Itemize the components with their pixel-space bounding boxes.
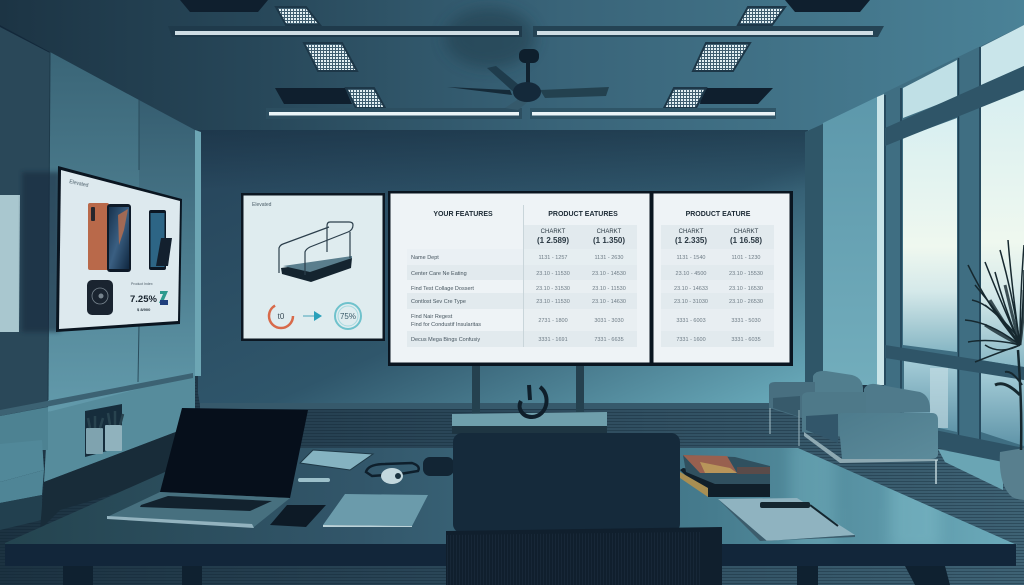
row values: 7331 - 1600 bbox=[676, 337, 706, 343]
TV heading: Elevated bbox=[69, 179, 89, 189]
laptop bbox=[107, 408, 308, 528]
panel: features table bbox=[390, 194, 650, 362]
row labels: Center Care Ne Eating bbox=[411, 271, 467, 277]
row values: 1131 - 1257 bbox=[539, 255, 567, 261]
table headings bbox=[433, 211, 618, 218]
conference table bbox=[5, 440, 1017, 585]
window frames bbox=[885, 47, 980, 440]
row values: 23.10 - 31530 bbox=[536, 286, 570, 292]
front armchair bbox=[799, 384, 938, 484]
sculpture ornament bbox=[520, 385, 547, 417]
row values bbox=[674, 255, 763, 343]
cabinet and sofa on left bbox=[0, 373, 195, 530]
row labels bbox=[411, 255, 481, 343]
ceiling light fixtures bbox=[168, 0, 884, 119]
row labels: Find for Condustif Insularitas bbox=[411, 322, 481, 328]
chart: orange ring: t0 bbox=[278, 312, 285, 321]
icon: colourful logo bbox=[159, 291, 168, 305]
office chair bbox=[446, 433, 722, 585]
chart: orange ring bbox=[269, 304, 293, 328]
stack of books bbox=[680, 455, 770, 497]
row values: 7331 - 6635 bbox=[594, 337, 624, 343]
sunlit floor bbox=[938, 449, 1003, 490]
ceiling fan shadow bbox=[445, 8, 535, 68]
row values: 3331 - 6035 bbox=[731, 337, 761, 343]
headphones bbox=[366, 463, 419, 484]
clipboard bbox=[300, 450, 373, 470]
column subheadings: CHARKT bbox=[734, 229, 759, 235]
icon: blue phone bbox=[149, 210, 172, 270]
row values: 1101 - 1230 bbox=[732, 255, 760, 261]
product screen with treadmill bbox=[241, 193, 385, 341]
ceiling bbox=[0, 0, 1024, 140]
panel: product feature table bbox=[654, 194, 790, 362]
row values: 3031 - 3030 bbox=[594, 318, 624, 324]
row values: 23.10 - 14633 bbox=[674, 286, 708, 292]
rear armchair bbox=[769, 371, 863, 434]
dark vents bbox=[180, 0, 870, 104]
row values: 23.10 - 11530 bbox=[592, 286, 626, 292]
column subheadings: (1 1.350) bbox=[593, 236, 625, 245]
column subheadings bbox=[675, 229, 762, 245]
chart: teal ring: 75% bbox=[340, 312, 356, 321]
left wall TV bbox=[56, 166, 182, 332]
stat caption: Product Index bbox=[131, 282, 153, 286]
right pillar and window wall bbox=[805, 25, 1024, 490]
earbuds and pen bbox=[298, 478, 330, 482]
table legs bbox=[63, 566, 950, 585]
row values: 23.10 - 11530 bbox=[536, 271, 570, 277]
phone bbox=[270, 505, 326, 527]
screen stand bbox=[452, 366, 607, 434]
table headings: YOUR FEATURES bbox=[433, 211, 493, 218]
long strip lights bbox=[168, 26, 522, 37]
main comparison screen bbox=[388, 191, 793, 366]
window panes bbox=[903, 25, 1024, 446]
column subheadings: CHARKT bbox=[679, 229, 704, 235]
row values: 1131 - 1540 bbox=[677, 255, 705, 261]
floor carpet bbox=[0, 376, 1024, 585]
column subheadings: (1 16.58) bbox=[730, 236, 762, 245]
back wall bbox=[198, 130, 808, 408]
row values: 23.10 - 11530 bbox=[536, 299, 570, 305]
row values: 23.10 - 26530 bbox=[729, 299, 763, 305]
row labels: Contlost Sev Cre Type bbox=[411, 299, 466, 305]
column subheadings: CHARKT bbox=[541, 229, 566, 235]
row values: 23.10 - 15530 bbox=[729, 271, 763, 277]
potted plant bbox=[965, 240, 1024, 500]
row values: 23.10 - 16530 bbox=[729, 286, 763, 292]
row values: 2731 - 1800 bbox=[538, 318, 568, 324]
arrow bbox=[303, 311, 322, 321]
row values bbox=[536, 255, 626, 343]
table headings: PRODUCT EATURES bbox=[548, 211, 618, 218]
icon: copper phone bbox=[88, 203, 131, 272]
row values: 3331 - 1691 bbox=[538, 337, 568, 343]
row values: 3331 - 5030 bbox=[731, 318, 761, 324]
row labels: Decus Mega Bings Confusiy bbox=[411, 337, 480, 343]
row values: 23.10 - 14630 bbox=[592, 299, 626, 305]
row labels: Find Test Collage Dossert bbox=[411, 286, 474, 292]
shelf niche with planters bbox=[85, 404, 123, 457]
row labels: Name Dept bbox=[411, 255, 439, 261]
column subheadings: (1 2.589) bbox=[537, 236, 569, 245]
stat sublabel: $ 8/900 bbox=[137, 307, 151, 312]
row values: 23.10 - 31030 bbox=[674, 299, 708, 305]
table column shading bbox=[407, 225, 637, 347]
desk items bbox=[270, 450, 454, 527]
led grid panels bbox=[276, 7, 785, 108]
sofa bbox=[0, 440, 44, 530]
cabinet dark base bbox=[40, 426, 195, 530]
column subheadings: CHARKT bbox=[597, 229, 622, 235]
screen heading: Elevated bbox=[252, 202, 272, 208]
notebook bbox=[323, 494, 428, 526]
wall reflection of screen bbox=[0, 195, 20, 332]
row values: 23.10 - 14530 bbox=[592, 271, 626, 277]
column subheadings bbox=[537, 229, 625, 245]
case bbox=[423, 457, 454, 476]
row values: 1131 - 2630 bbox=[595, 255, 623, 261]
icon: wireless charger bbox=[87, 280, 113, 315]
row values: 3331 - 6003 bbox=[676, 318, 706, 324]
chart: teal ring bbox=[335, 303, 361, 329]
row values: 23.10 - 4500 bbox=[676, 271, 706, 277]
armchairs bbox=[769, 371, 938, 484]
stat: percent: 7.25% bbox=[130, 294, 157, 305]
ceiling fan bbox=[447, 49, 609, 110]
row labels: Find Nair Regest bbox=[411, 314, 453, 320]
table heading: PRODUCT EATURE bbox=[686, 211, 751, 218]
left wall panels bbox=[0, 25, 201, 412]
icon: treadmill bbox=[279, 222, 353, 282]
notebook and pen bbox=[718, 498, 855, 541]
column subheadings: (1 2.335) bbox=[675, 236, 707, 245]
